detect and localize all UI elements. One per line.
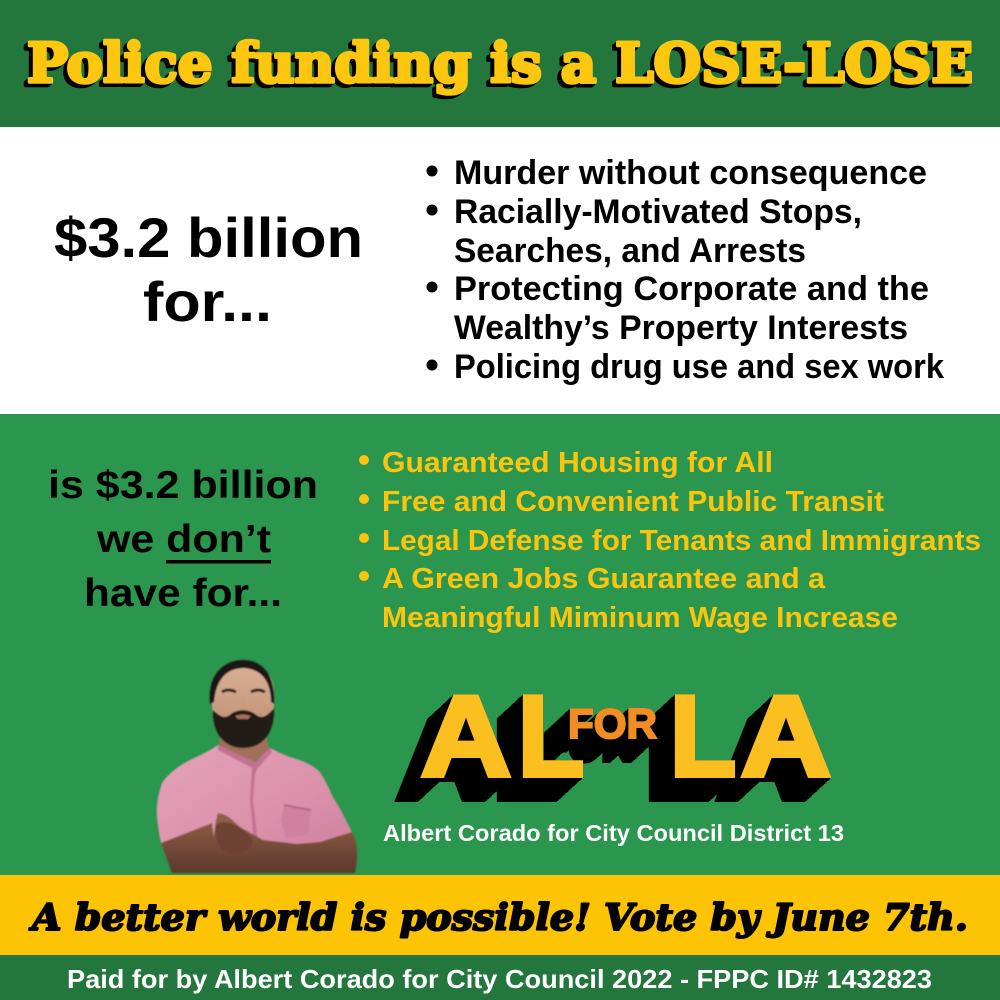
call to action text: A better world is possible! Vote by June 7th. [29,897,968,939]
logo: AL for LA [421,674,831,800]
list: what we could fund: Free and Convenient Public Transit [382,486,884,518]
hair [210,660,274,704]
logo: AL for LA: A [421,674,511,800]
heading: 3.2 billion for: $3.2 billion [54,206,363,269]
shirt [157,745,352,862]
panel: what we lose [0,414,1000,875]
heading: is 3.2 billion we don't have for: we don’t [96,518,271,561]
logo: AL for LA: L [518,674,584,800]
list: what we could fund [359,447,981,634]
shirt pocket [281,805,311,838]
head [212,664,274,745]
logo: AL for LA: A [741,674,831,800]
list: what we could fund: Legal Defense for Tenants and Immigrants [382,525,981,557]
logo: AL for LA: FOR [568,700,657,747]
heading: 3.2 billion for [54,206,363,333]
photo: candidate portrait [157,660,357,873]
collar and placket [218,745,272,842]
list: what we could fund: A Green Jobs Guarantee and a [382,563,826,595]
arms [161,813,357,873]
list: what police funding pays for: Policing drug use and sex work [454,348,944,386]
eyes [222,690,265,692]
panel: title banner [0,0,1000,127]
list: what police funding pays for: Murder without consequence [454,154,927,192]
title: Police funding is a LOSE-LOSE [27,31,973,95]
heading: is 3.2 billion we don't have for [48,464,318,615]
list: what police funding pays for: Protecting Corporate and the [454,270,929,308]
panel: police spending [0,127,1000,414]
list: what police funding pays for [426,154,944,386]
logo subtitle: Albert Corado for City Council District 13 [383,820,844,846]
list: what police funding pays for: Searches, and Arrests [454,232,806,270]
disclaimer text: Paid for by Albert Corado for City Council 2022 - FPPC ID# 1432823 [67,964,932,994]
heading: 3.2 billion for: for... [143,270,272,333]
beard [213,708,274,748]
heading: is 3.2 billion we don't have for: is $3.2 billion [48,464,318,507]
list: what we could fund: Guaranteed Housing for All [382,447,773,479]
heading: is 3.2 billion we don't have for: have for... [84,572,282,615]
nose [237,696,249,708]
list: what police funding pays for: Wealthy’s Property Interests [454,309,908,347]
list: what we could fund: Meaningful Miminum Wage Increase [382,602,898,634]
mouth [235,714,251,719]
panel: call to action [0,875,1000,955]
hand shading [216,822,253,854]
list: what police funding pays for: Racially-Motivated Stops, [454,193,862,231]
neck [218,730,270,768]
logo: AL for LA: L [670,674,736,800]
panel: disclaimer [0,955,1000,1000]
